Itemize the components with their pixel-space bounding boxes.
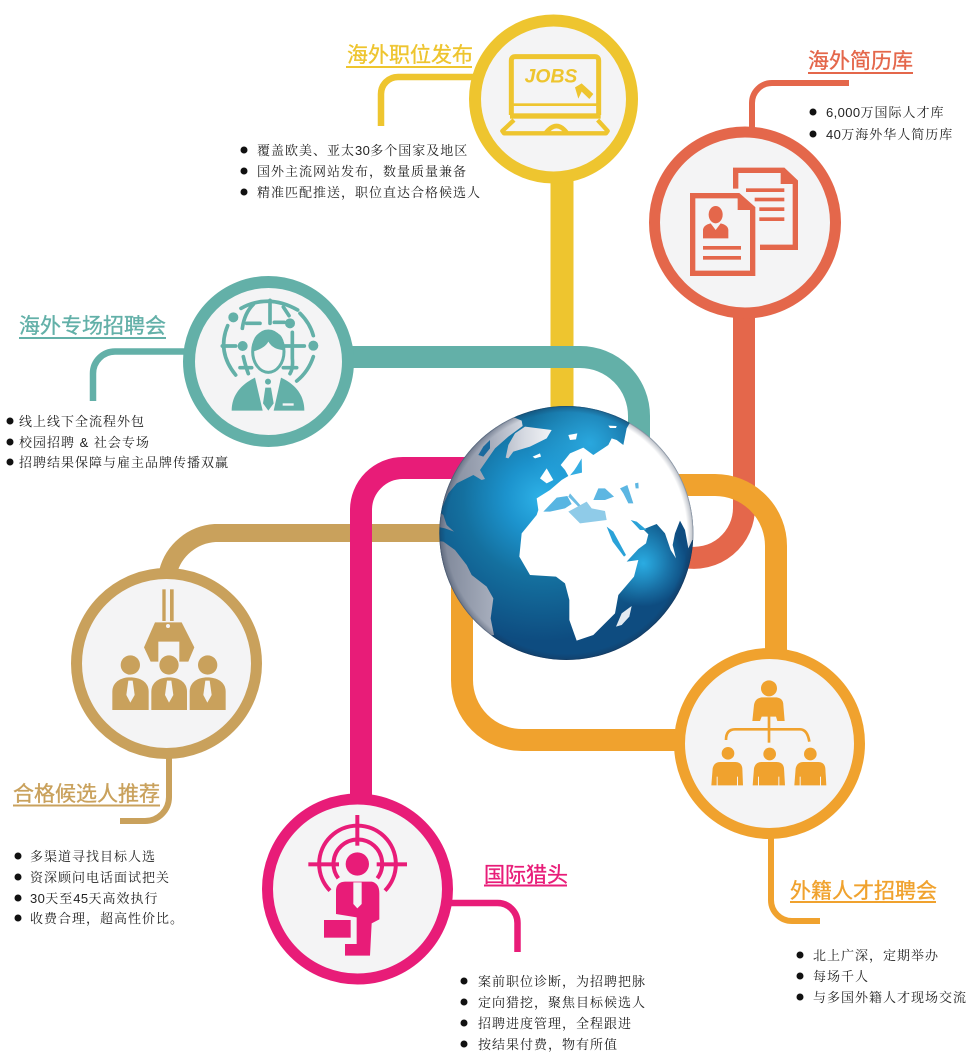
title: 海外职位发布 — [347, 44, 473, 67]
panel: overseas job posting — [240, 20, 632, 201]
bullet list — [460, 974, 646, 1053]
Aral Sea — [635, 483, 639, 488]
connector: yellow branch — [381, 77, 475, 126]
bullet list: 覆盖欧美、亚太30多个国家及地区 — [257, 143, 468, 158]
Caspian Sea — [620, 485, 633, 503]
ring: red — [654, 132, 836, 313]
ring: orange — [680, 654, 860, 834]
panel: overseas resume database — [654, 50, 953, 313]
panel: international headhunting — [268, 799, 646, 1053]
title: 外籍人才招聘会 — [790, 880, 937, 903]
connector: orange branch — [771, 835, 820, 921]
connector: yellow trunk — [550, 175, 574, 420]
bullet list: 40万海外华人简历库 — [826, 127, 953, 142]
bullet list: 案前职位诊断，为招聘把脉 — [478, 974, 646, 990]
icon: global person — [222, 300, 318, 411]
ring: tan — [76, 574, 256, 754]
bullet list: 招聘进度管理，全程跟进 — [478, 1016, 632, 1032]
bullet list — [240, 143, 481, 201]
bullet list: 多渠道寻找目标人选 — [30, 849, 156, 864]
icon: org chart of people — [711, 680, 826, 786]
Red Sea — [607, 527, 626, 557]
West Mediterranean — [543, 496, 572, 512]
bullet list: 定向猎挖，聚焦目标候选人 — [478, 995, 646, 1011]
bullet list — [14, 849, 184, 927]
Afro-Eurasia — [519, 423, 694, 641]
South America — [440, 541, 494, 636]
North America — [442, 418, 523, 508]
Persian Gulf — [631, 520, 647, 530]
icon: target on person — [308, 815, 407, 956]
Baltic — [570, 458, 582, 475]
Arctic island — [608, 426, 617, 428]
bullet list: 国外主流网站发布，数量质量兼备 — [257, 164, 467, 180]
Madagascar — [616, 606, 632, 627]
icon: laptop JOBS: JOBS — [525, 67, 577, 88]
title: 海外简历库 — [808, 50, 913, 73]
Britain — [540, 468, 553, 483]
bullet list — [796, 948, 967, 1005]
bullet list: 30天至45天高效执行 — [30, 891, 159, 906]
bullet list: 线上线下全流程外包 — [19, 414, 145, 429]
bullet list — [6, 414, 229, 470]
icon: claw picking candidates — [112, 589, 226, 710]
bullet list: 资深顾问电话面试把关 — [30, 870, 170, 885]
East Mediterranean — [568, 502, 607, 523]
connector: red trunk — [685, 310, 744, 558]
ring: yellow — [475, 20, 632, 178]
title: 海外专场招聘会 — [19, 315, 166, 338]
panel: qualified candidate recommendation — [13, 574, 256, 927]
icon: resumes — [693, 169, 797, 273]
title: 合格候选人推荐 — [13, 783, 160, 806]
bullet list: 校园招聘 & 社会专场 — [19, 435, 150, 450]
connector: teal trunk — [340, 357, 639, 450]
panel: overseas dedicated job fairs — [6, 282, 348, 470]
bullet list: 按结果付费，物有所值 — [478, 1037, 618, 1053]
connector: pink branch — [450, 903, 518, 952]
Iceland — [533, 453, 541, 458]
bullet list: 精准匹配推送，职位直达合格候选人 — [257, 185, 481, 201]
ring: pink — [268, 799, 448, 979]
connector: red branch — [752, 83, 849, 132]
bullet list: 收费合理，超高性价比。 — [30, 911, 184, 927]
bullet list: 每场千人 — [813, 969, 869, 984]
Svalbard-like island — [568, 433, 577, 440]
bullet list: 6,000万国际人才库 — [826, 105, 945, 120]
Greenland — [506, 427, 552, 458]
Adriatic — [568, 494, 580, 506]
ring: teal — [189, 282, 348, 441]
connector: teal branch — [93, 352, 190, 401]
connector: tan branch — [120, 755, 169, 821]
Central America — [440, 513, 454, 532]
icon: laptop JOBS — [502, 57, 608, 133]
bullet list: 北上广深，定期举办 — [813, 948, 939, 964]
connector: pink trunk — [361, 468, 480, 805]
title: 国际猎头 — [484, 864, 568, 887]
bullet list — [810, 105, 953, 142]
connector: tan trunk — [168, 533, 450, 572]
connector: orange lower trunk — [462, 580, 685, 740]
Hudson Bay — [478, 440, 490, 457]
globe — [439, 406, 694, 660]
panel: expat talent job fair — [680, 654, 967, 1005]
connector: orange upper trunk — [675, 485, 776, 655]
Black Sea — [593, 488, 614, 500]
bullet list: 与多国外籍人才现场交流 — [813, 990, 967, 1005]
bullet list: 招聘结果保障与雇主品牌传播双赢 — [19, 455, 229, 470]
